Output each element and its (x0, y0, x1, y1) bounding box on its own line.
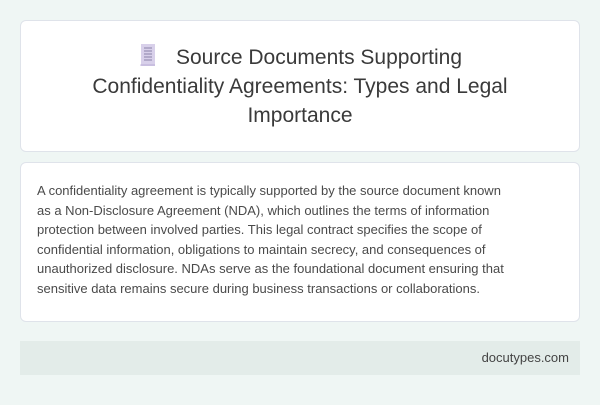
title heading: Source Documents Supporting (176, 46, 462, 69)
description text: A confidentiality agreement is typically supported by the source document known (37, 183, 501, 198)
description panel (20, 162, 580, 322)
description text (37, 183, 504, 296)
footer: docutypes.com (482, 350, 569, 365)
footer (20, 341, 580, 375)
description text: as a Non-Disclosure Agreement (NDA), which outlines the terms of information (37, 202, 489, 218)
title heading: Confidentiality Agreements: Types and Legal (92, 75, 508, 98)
description text: confidential information, obligations to maintain secrecy, and consequences of (37, 242, 486, 256)
description text: unauthorized disclosure. NDAs serve as the foundational document ensuring that (37, 261, 504, 276)
description text: protection between involved parties. This legal contract specifies the scope of (37, 222, 482, 237)
title heading (92, 44, 508, 127)
icon: document (140, 44, 155, 66)
title heading: Importance (247, 104, 353, 127)
description text: sensitive data remains secure during business transactions or collaborations. (37, 280, 480, 296)
title panel (20, 20, 580, 152)
